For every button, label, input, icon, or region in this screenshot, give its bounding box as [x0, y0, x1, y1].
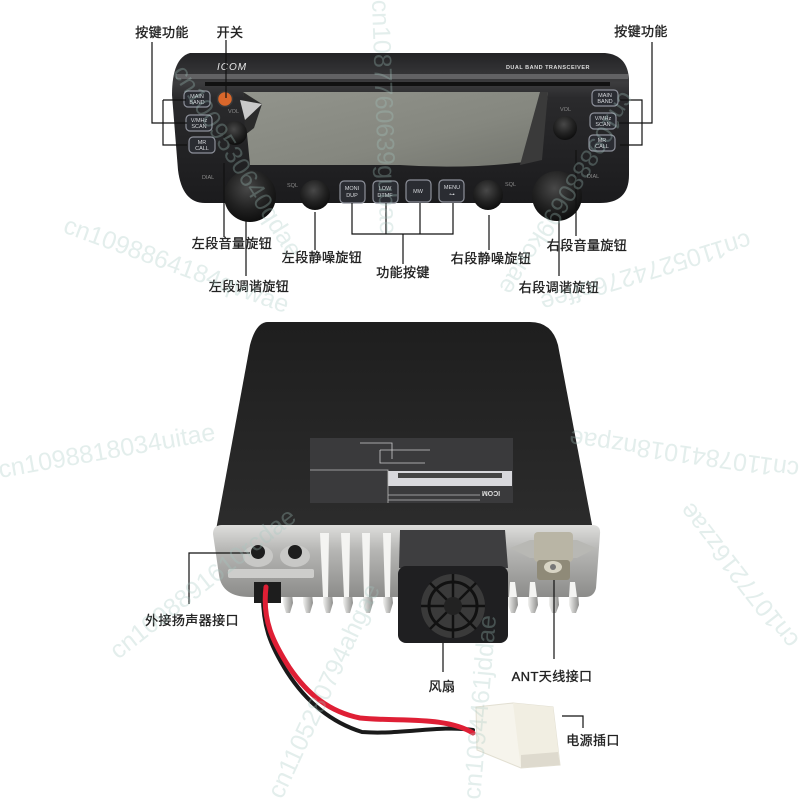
- label: right tuning knob: 右段调谐旋钮: [519, 280, 599, 295]
- label: function keys: 功能按键: [376, 265, 430, 280]
- function buttons: DTMF: [377, 193, 393, 199]
- volume knobs: [223, 116, 577, 145]
- brand logo: ICOM: [217, 62, 247, 73]
- left band buttons: MR: [198, 140, 206, 146]
- label: power socket: 电源插口: [566, 733, 620, 748]
- serial number label: ICOM: [482, 489, 500, 496]
- left band buttons: BAND: [189, 100, 205, 106]
- function buttons: MW: [413, 189, 424, 195]
- left band buttons: SCAN: [191, 124, 207, 130]
- label: left tuning knob: 左段调谐旋钮: [209, 279, 289, 294]
- heat sink fins: [320, 533, 577, 597]
- right band buttons: CALL: [595, 144, 609, 150]
- function buttons: MONI: [345, 186, 360, 192]
- metal body top: [216, 322, 593, 530]
- dial and squelch captions: SQL: [287, 183, 298, 189]
- function buttons: DUP: [346, 193, 358, 199]
- dial and squelch captions: SQL: [505, 182, 516, 188]
- display screen: [243, 92, 548, 167]
- power connector plug: [476, 703, 560, 768]
- right band buttons: MR: [598, 138, 606, 144]
- squelch knobs: [300, 180, 503, 210]
- rear view of the transceiver: [213, 322, 600, 643]
- watermarks: cn1098818034uitae: [0, 418, 217, 484]
- dial and squelch captions: DIAL: [202, 175, 214, 181]
- label: key function right: 按键功能: [614, 24, 668, 39]
- watermarks: cn1098891610rcdae: [104, 502, 301, 665]
- dial and squelch captions: VOL: [228, 109, 239, 115]
- label: left volume knob: 左段音量旋钮: [192, 236, 272, 251]
- watermarks: cn1098880699kouae: [493, 87, 641, 300]
- dial and squelch captions: DIAL: [587, 174, 599, 180]
- heat sink fin tips: [283, 580, 579, 613]
- fan housing: [398, 530, 508, 643]
- model name: DUAL BAND TRANSCEIVER: [506, 65, 590, 71]
- label: right volume knob: 右段音量旋钮: [547, 238, 627, 253]
- label: key function left: 按键功能: [135, 25, 189, 40]
- left band buttons: V/MHz: [191, 118, 208, 124]
- power button: [218, 92, 232, 106]
- right band buttons: [589, 90, 618, 151]
- watermarks: cn1105280794ahgae: [262, 579, 386, 800]
- function buttons: MENU: [444, 185, 460, 191]
- watermarks: cn1009530640qdae: [167, 60, 308, 263]
- right band buttons: SCAN: [595, 122, 611, 128]
- watermarks: cn1098864184qvwae: [60, 211, 293, 319]
- function buttons: LOW: [379, 186, 392, 192]
- leader lines: [152, 40, 652, 728]
- antenna connector: [510, 532, 596, 580]
- silver rear plate: [213, 525, 600, 597]
- front panel of the transceiver: [172, 53, 629, 222]
- right band buttons: MAIN: [598, 93, 612, 99]
- watermarks: cn1087760639gubae: [366, 0, 402, 235]
- label: external speaker port: 外接扬声器接口: [145, 613, 239, 628]
- serial number label: [310, 438, 513, 503]
- left band buttons: CALL: [195, 146, 209, 152]
- tuning dial knobs: [224, 170, 582, 222]
- left band buttons: MAIN: [190, 94, 204, 100]
- label: right squelch knob: 右段静噪旋钮: [451, 251, 531, 266]
- dial and squelch captions: VOL: [560, 107, 571, 113]
- function buttons: ⊶: [449, 192, 455, 198]
- watermarks: cn1094461jddae: [458, 614, 502, 800]
- dial and squelch captions: [202, 107, 599, 189]
- power cable: [263, 587, 473, 733]
- right band buttons: BAND: [597, 99, 613, 105]
- label: left squelch knob: 左段静噪旋钮: [282, 250, 362, 265]
- speaker jacks: [228, 545, 314, 578]
- left band buttons: [184, 91, 215, 153]
- power cable grommet: [254, 582, 281, 603]
- label: antenna port: ANT天线接口: [512, 669, 592, 684]
- watermarks: cn1107841018nzpae: [567, 424, 800, 484]
- watermarks: cn1105274276offee: [537, 226, 754, 317]
- right band buttons: V/MHz: [595, 116, 612, 122]
- function buttons: [340, 180, 464, 203]
- label: fan: 风扇: [429, 679, 455, 694]
- label: power switch: 开关: [217, 25, 243, 40]
